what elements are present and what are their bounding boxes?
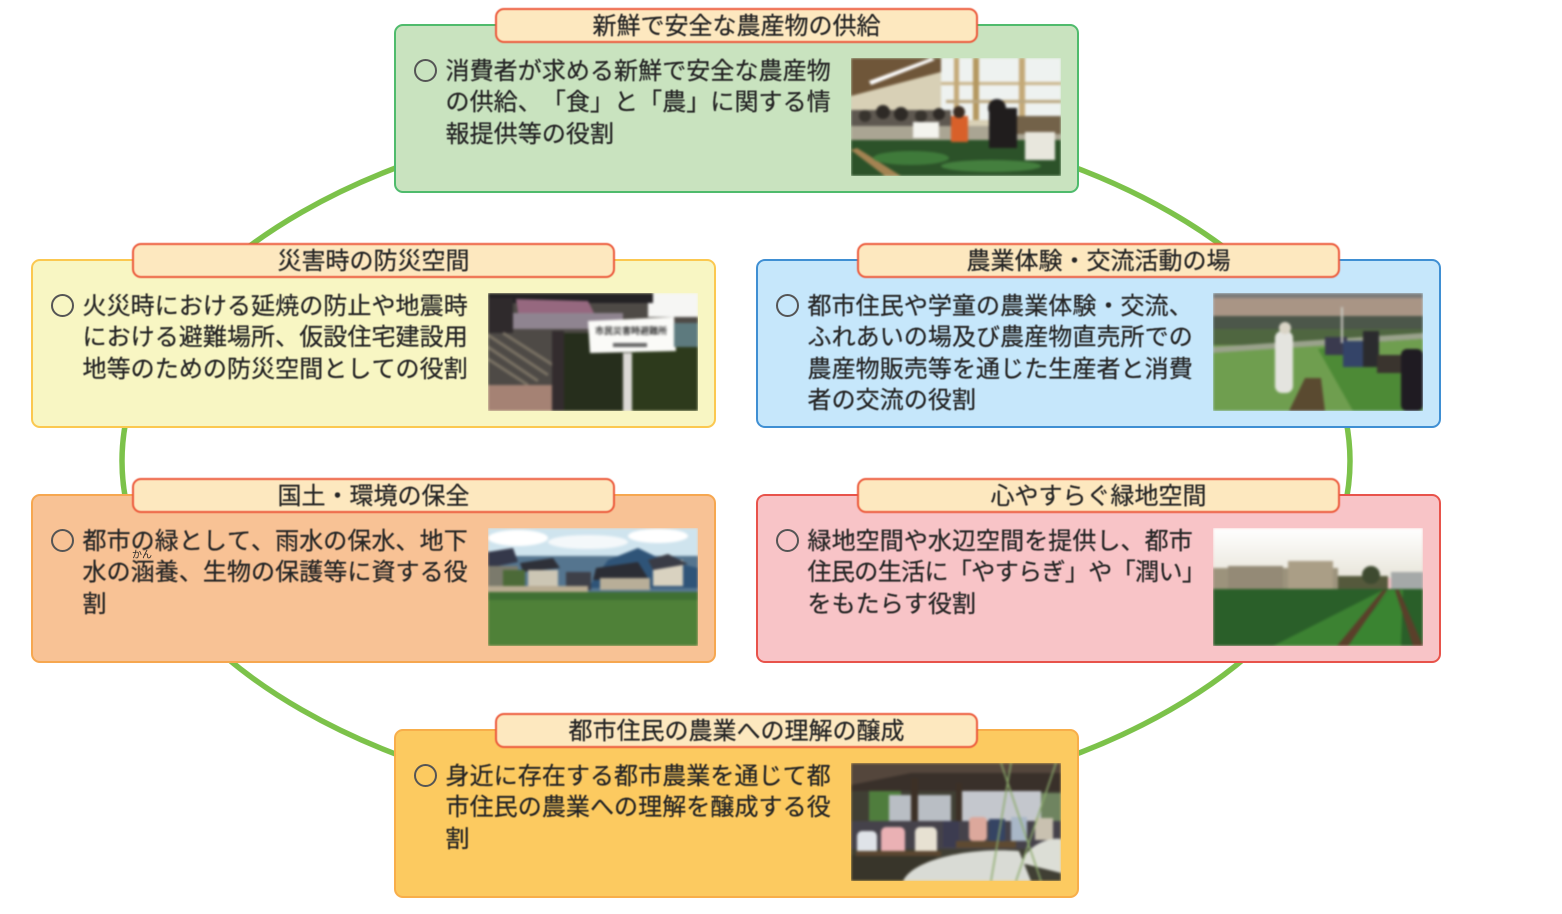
icon: bullet circle: [414, 59, 437, 82]
text block: ふれあいの場及び農産物直売所での: [808, 324, 1193, 351]
heading: [495, 8, 978, 43]
text block: [446, 58, 831, 148]
text block: における避難場所、仮設住宅建設用: [82, 324, 468, 351]
text block: 水の涵養、生物の保護等に資する役: [82, 559, 468, 586]
heading: [495, 713, 978, 748]
text block: [446, 762, 831, 852]
text block: 割: [446, 826, 470, 852]
icon: bullet circle: [776, 529, 799, 552]
heading: 農業体験・交流活動の場: [966, 248, 1230, 275]
photo: farm experience field: [1213, 293, 1423, 411]
text block: [82, 528, 468, 618]
icon: bullet circle: [51, 294, 74, 317]
text block: [807, 528, 1205, 618]
panel background: [394, 729, 1079, 898]
heading: [857, 243, 1340, 278]
photo: evacuation sign: 市民災害時避難所: [595, 325, 667, 336]
heading: 国土・環境の保全: [278, 483, 470, 510]
text block: [807, 292, 1193, 414]
heading: 心やすらぐ緑地空間: [990, 483, 1206, 510]
text block: [82, 292, 468, 382]
furigana: かん: [132, 550, 152, 561]
panel: disaster prevention space: [31, 242, 716, 428]
text block: 者の交流の役割: [808, 387, 976, 414]
text block: 身近に存在する都市農業を通じて都: [446, 762, 831, 790]
panel background: [31, 494, 716, 663]
text block: 住民の生活に「やすらぎ」や「潤い」: [808, 559, 1205, 586]
panel: farming experience and exchange: [756, 242, 1441, 428]
text block: 緑地空間や水辺空間を提供し、都市: [808, 528, 1193, 554]
panel: fresh and safe produce: [394, 7, 1079, 193]
text block: 農産物販売等を通じた生産者と消費: [808, 356, 1193, 382]
icon: bullet circle: [414, 764, 437, 787]
icon: bullet circle: [776, 294, 799, 317]
text block: の供給、「食」と「農」に関する情: [446, 89, 831, 116]
heading: 災害時の防災空間: [278, 248, 470, 275]
panel: fostering understanding of agriculture: [394, 712, 1079, 898]
text block: 市住民の農業への理解を醸成する役: [446, 794, 831, 821]
panel background: [756, 494, 1441, 663]
heading: 新鮮で安全な農産物の供給: [592, 13, 880, 40]
text block: 報提供等の役割: [446, 120, 614, 148]
panel: land and environment conservation: [31, 477, 716, 663]
panel background: [756, 259, 1441, 428]
text block: 地等のための防災空間としての役割: [82, 356, 468, 382]
icon: bullet circle: [51, 529, 74, 552]
text block: 割: [82, 590, 107, 618]
photo: outdoor gathering: [851, 763, 1061, 881]
panel background: [394, 24, 1079, 193]
photo: farm market hall: [851, 58, 1061, 176]
photo: vegetable field and apartments: [1213, 528, 1423, 646]
heading: [857, 478, 1340, 513]
heading: 都市住民の農業への理解の醸成: [568, 718, 904, 745]
photo: houses and field: [488, 528, 698, 646]
panel: relaxing green space: [756, 477, 1441, 663]
heading: [132, 478, 615, 513]
text block: 消費者が求める新鮮で安全な農産物: [446, 58, 831, 84]
heading: [132, 243, 615, 278]
photo: evacuation sign: [488, 293, 698, 411]
panel background: [31, 259, 716, 428]
text block: 火災時における延焼の防止や地震時: [82, 292, 468, 320]
text block: をもたらす役割: [808, 590, 976, 618]
text block: 都市の緑として、雨水の保水、地下: [82, 528, 468, 554]
text block: 都市住民や学童の農業体験・交流、: [808, 292, 1193, 320]
